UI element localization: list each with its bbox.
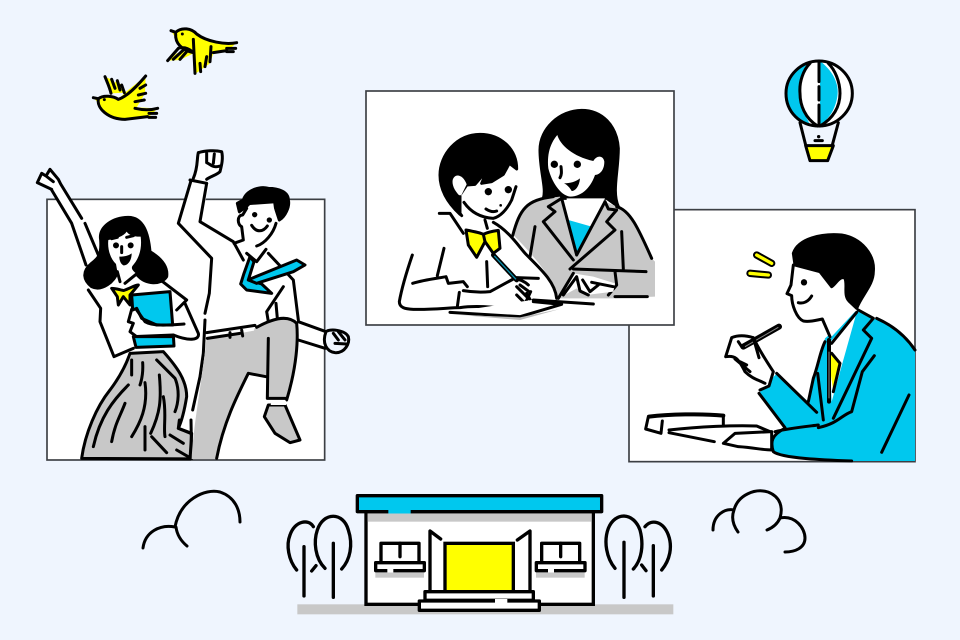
panel: teacher and student (366, 91, 674, 325)
building: school with trees (288, 496, 673, 614)
student (399, 134, 557, 310)
worksheet paper (450, 300, 593, 320)
door (430, 531, 530, 592)
icon: left cloud (143, 491, 240, 548)
icon: yellow birds (93, 29, 237, 119)
icon: hot air balloon (786, 61, 852, 161)
teacher (513, 110, 655, 298)
book (132, 292, 174, 347)
skirt (82, 352, 192, 459)
icon: hand on desk (723, 432, 772, 450)
trees right (606, 516, 670, 597)
right arm (298, 322, 327, 348)
girl (37, 169, 199, 459)
tie (241, 257, 305, 293)
teacher hand (558, 273, 615, 298)
panel: cheering students (37, 151, 349, 460)
school body (366, 512, 593, 604)
entrance steps (419, 592, 539, 610)
roof (357, 496, 602, 512)
trees left (288, 516, 351, 597)
icon: pen and hand (726, 327, 779, 390)
panel: student writing at desk (629, 210, 915, 462)
icon: upper bird (168, 29, 237, 74)
trousers (192, 318, 297, 459)
icon: right cloud (713, 491, 805, 552)
ground (297, 604, 673, 614)
right window (536, 543, 585, 578)
boy (178, 151, 349, 459)
icon: sparkle ticks (750, 255, 772, 275)
icon: lower bird (93, 76, 158, 119)
left window (375, 543, 424, 578)
icon: book on desk (646, 414, 770, 442)
